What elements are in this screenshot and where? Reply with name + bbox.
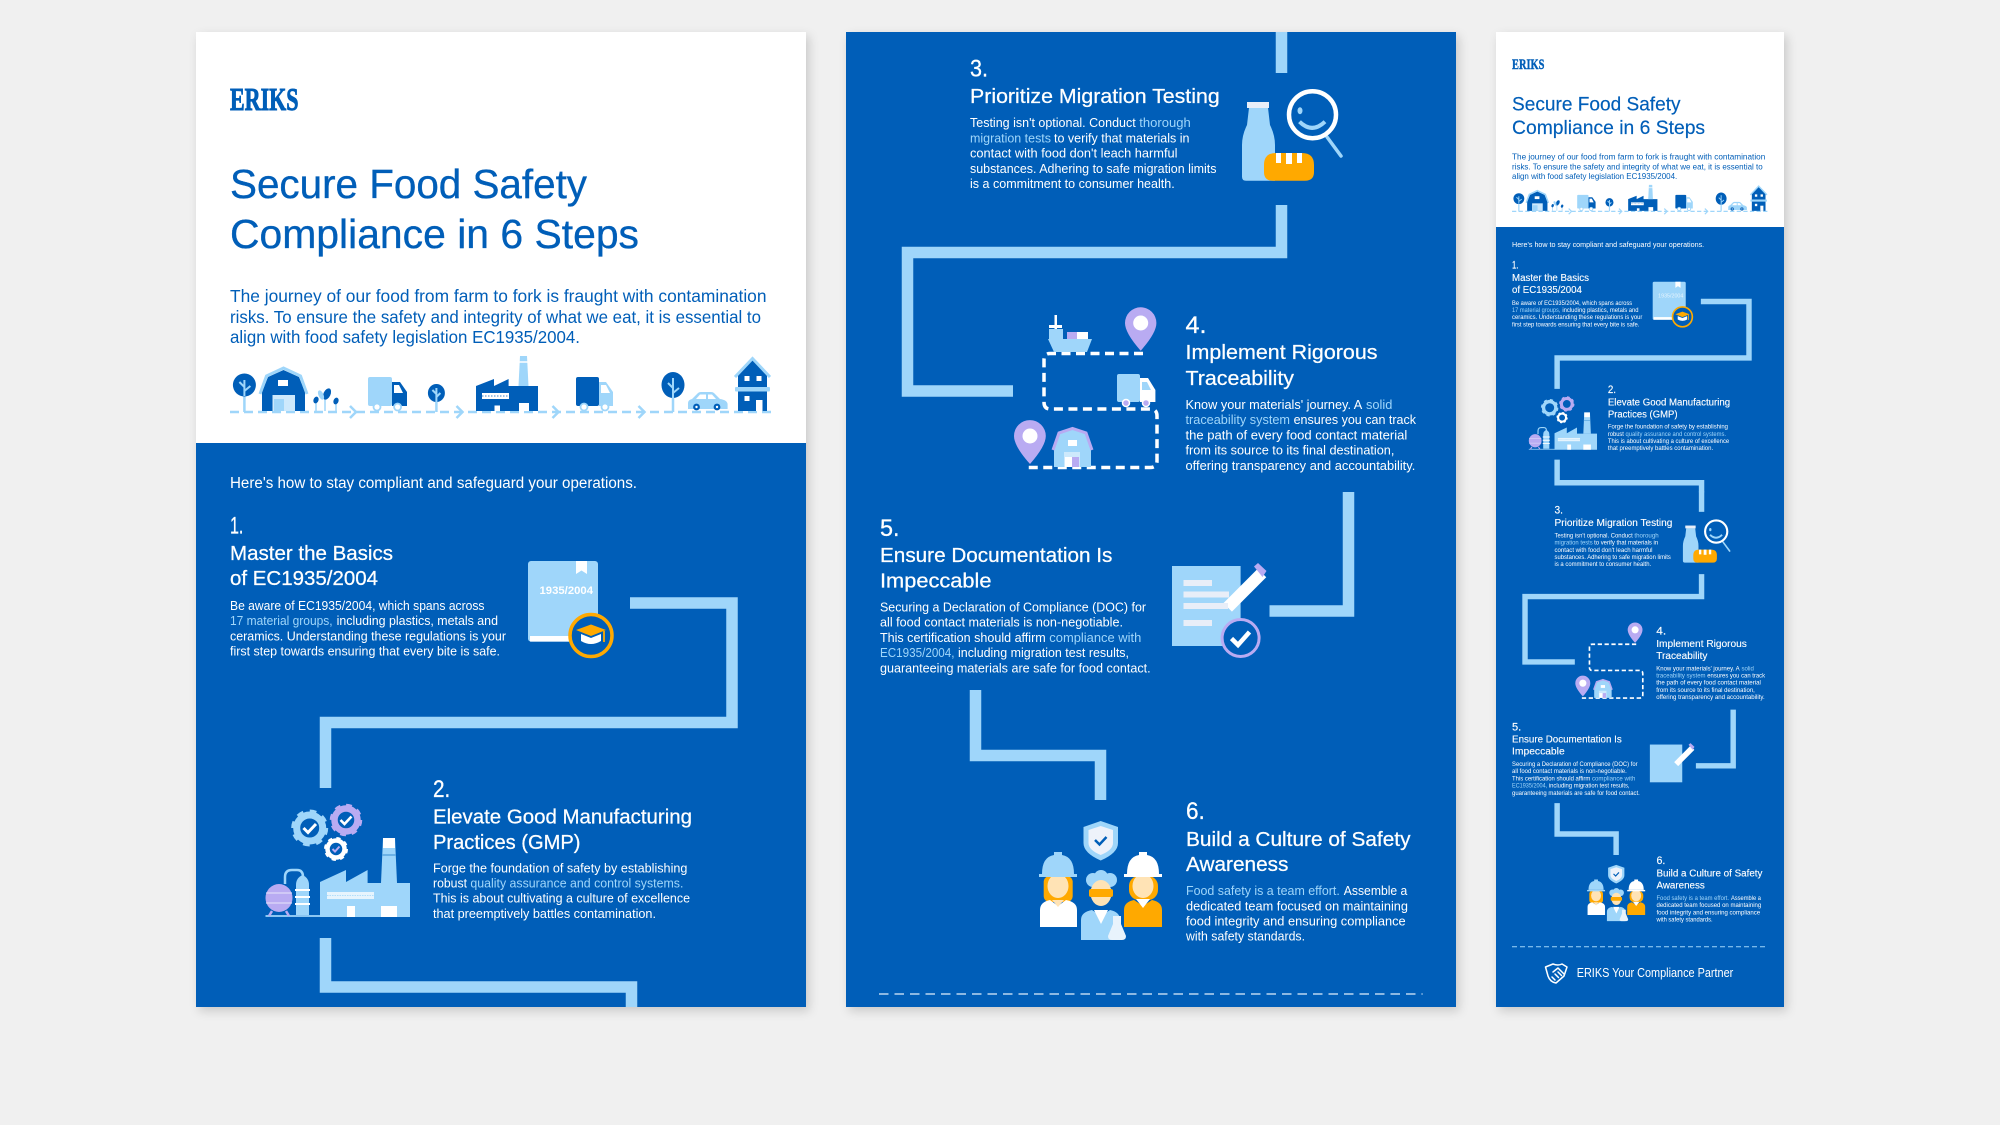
connector: step 3 to step 4 xyxy=(908,205,1282,391)
step 3 text small xyxy=(1555,505,1672,568)
title xyxy=(230,161,639,257)
step 5 text: compliance with xyxy=(1049,630,1141,645)
step 4 text small: offering transparency and accountability. xyxy=(1656,694,1765,701)
step 6 text: Build a Culture of Safety xyxy=(1186,828,1411,851)
step 6 text xyxy=(1185,798,1411,944)
step 2 text small: Practices (GMP) xyxy=(1608,410,1677,421)
icon small: document and pen xyxy=(1650,743,1694,782)
step 1 text xyxy=(230,512,507,658)
step 3 text small: to verify that materials in xyxy=(1594,540,1659,547)
icon small: bottle, bread and magnifier xyxy=(1683,520,1730,563)
step 6 text: with safety standards. xyxy=(1185,929,1305,944)
step 2 text: Practices (GMP) xyxy=(433,831,580,854)
step 1 text small: 17 material groups, xyxy=(1512,307,1561,314)
step 2 text small: quality assurance and control systems. xyxy=(1626,431,1726,438)
overview upper part: scaled cover content xyxy=(1512,57,1767,492)
step 4 text xyxy=(1186,312,1416,473)
step 5 text small: This certification should affirm xyxy=(1512,775,1590,782)
step 6 text: food integrity and ensuring compliance xyxy=(1186,914,1406,929)
step 2 text small xyxy=(1608,384,1730,452)
step 3 text: Testing isn't optional. Conduct xyxy=(970,115,1136,130)
step 1 text: including plastics, metals and xyxy=(337,613,498,628)
step 2 text: This is about cultivating a culture of excellence xyxy=(433,891,690,906)
step 3 text: migration tests xyxy=(970,131,1051,146)
step 5 text small: EC1935/2004, xyxy=(1512,783,1547,790)
illustration: farm to fork journey xyxy=(230,356,771,418)
panel background xyxy=(846,32,1456,1007)
step 3 text xyxy=(970,56,1220,191)
step 4 text: Know your materials' journey. A xyxy=(1186,397,1363,412)
step 5 text small xyxy=(1512,721,1640,797)
icon small: safety team with shield xyxy=(1587,865,1645,921)
panel background xyxy=(1496,32,1784,1007)
icon: regulation book with graduation cap xyxy=(528,561,612,656)
step 5 text small: Ensure Documentation Is xyxy=(1512,735,1622,746)
step 1 text small: 1. xyxy=(1512,260,1518,272)
step 4 text small: Implement Rigorous xyxy=(1656,639,1747,650)
logo: ERIKS small: ERIKS xyxy=(1512,57,1544,73)
step 3 text: to verify that materials in xyxy=(1054,131,1190,146)
connector: step 4 to step 5 xyxy=(1270,492,1348,611)
connector small: step 3 to step 4 xyxy=(1525,574,1702,662)
connector small: step 2 to step 3 xyxy=(1557,460,1702,492)
step 2 text: Elevate Good Manufacturing xyxy=(433,806,692,828)
step 6 text small: food integrity and ensuring compliance xyxy=(1656,909,1761,916)
step 4 text small: solid xyxy=(1741,665,1754,672)
logo: ERIKS: ERIKS xyxy=(230,81,298,117)
step 4 text: 4. xyxy=(1186,312,1206,339)
step 4 text: Implement Rigorous xyxy=(1186,341,1378,364)
icon: regulation book with graduation cap: 1935/2004 xyxy=(540,585,594,597)
step 4 text small xyxy=(1656,626,1766,701)
connector small: step 5 to step 6 xyxy=(1557,803,1616,855)
step 4 text: the path of every food contact material xyxy=(1186,427,1407,442)
icon: declaration document with pen and check xyxy=(1172,563,1266,656)
step 6 text small: Build a Culture of Safety xyxy=(1656,869,1763,880)
step 5 text small: guaranteeing materials are safe for food contact. xyxy=(1512,790,1640,797)
connector small: step 1 to step 2 xyxy=(1557,302,1749,389)
step 5 text: 5. xyxy=(880,515,900,542)
connector small: top entry into step 3 xyxy=(1696,492,1707,512)
step 5 text small: compliance with xyxy=(1592,775,1636,782)
intro text: risks. To ensure the safety and integrity of what we eat, it is essential to xyxy=(230,307,761,327)
step 3 text small: migration tests xyxy=(1555,540,1593,547)
lead-in text small: Here's how to stay compliant and safeguard your operations. xyxy=(1512,240,1704,249)
step 1 text small: Master the Basics xyxy=(1512,273,1589,284)
step 6 text: Awareness xyxy=(1186,853,1288,876)
intro text: The journey of our food from farm to fork is fraught with contamination xyxy=(230,286,766,306)
step 3 text small: is a commitment to consumer health. xyxy=(1555,561,1651,568)
step 3 text: is a commitment to consumer health. xyxy=(970,176,1175,191)
icon: gears and factory xyxy=(266,806,410,917)
step 5 text small: Impeccable xyxy=(1512,747,1565,758)
step 5 text small: 5. xyxy=(1512,721,1521,733)
step 2 text small: robust xyxy=(1608,431,1624,438)
step 2 text: quality assurance and control systems. xyxy=(470,876,683,890)
step 5 text small: Securing a Declaration of Compliance (DOC) for xyxy=(1512,761,1638,768)
step 4 text: solid xyxy=(1366,397,1392,412)
panel: full-length overview xyxy=(1496,32,1784,1007)
illustration small: farm to fork journey xyxy=(1512,185,1767,214)
lead-in text: Here's how to stay compliant and safeguard your operations. xyxy=(230,475,637,492)
icon: safety team with shield xyxy=(1039,821,1162,940)
step 2 text small: 2. xyxy=(1608,384,1616,396)
title small: Secure Food Safety xyxy=(1512,93,1681,115)
step 3 text: thorough xyxy=(1139,115,1191,130)
step 1 text: of EC1935/2004 xyxy=(230,567,378,590)
title small: Compliance in 6 Steps xyxy=(1512,117,1705,139)
step 2 text: robust xyxy=(433,876,467,890)
step 4 text: offering transparency and accountability. xyxy=(1186,458,1415,473)
step 3 text small: contact with food don't leach harmful xyxy=(1555,547,1652,554)
panel: page one cover xyxy=(196,32,806,1007)
step 3 text small: 3. xyxy=(1555,505,1563,517)
step 6 text: Assemble a xyxy=(1344,883,1408,898)
step 1 text small xyxy=(1512,260,1642,328)
icon small: regulation book xyxy=(1653,282,1692,327)
step 4 text: Traceability xyxy=(1186,367,1295,390)
step 4 text small: 4. xyxy=(1656,626,1666,638)
step 2 text small: that preemptively battles contamination. xyxy=(1608,445,1713,452)
connector: step 1 to step 2 xyxy=(326,603,732,788)
step 2 text xyxy=(433,776,692,921)
footer: compliance partner: ERIKS Your Compliance Partner xyxy=(1577,966,1733,980)
step 4 text small: the path of every food contact material xyxy=(1656,680,1761,687)
step 6 text: 6. xyxy=(1186,798,1205,825)
step 3 text small: Prioritize Migration Testing xyxy=(1555,518,1672,529)
title: Secure Food Safety xyxy=(230,161,587,207)
step 5 text: Securing a Declaration of Compliance (DOC) for xyxy=(880,600,1147,614)
step 2 text: Forge the foundation of safety by establishing xyxy=(433,860,687,876)
panel background: white header and blue body xyxy=(196,32,806,1007)
overview lower part: scaled steps content xyxy=(1512,492,1766,923)
step 1 text: Be aware of EC1935/2004, which spans across xyxy=(230,598,485,613)
intro text: align with food safety legislation EC1935/2004. xyxy=(230,327,580,347)
step 3 text small: substances. Adhering to safe migration limits xyxy=(1555,554,1671,561)
step 4 text small: from its source to its final destination, xyxy=(1656,687,1755,694)
step 1 text small: Be aware of EC1935/2004, which spans across xyxy=(1512,300,1632,307)
step 2 text small: Elevate Good Manufacturing xyxy=(1608,398,1730,409)
step 3 text: substances. Adhering to safe migration limits xyxy=(970,161,1217,176)
intro text small: The journey of our food from farm to fork is fraught with contamination xyxy=(1512,152,1766,161)
icon small: route with pins and barn xyxy=(1575,622,1643,698)
icon: traceability route with pins, ship, truck and barn xyxy=(1014,307,1157,468)
step 5 text: Ensure Documentation Is xyxy=(880,544,1112,567)
step 6 text: Food safety is a team effort. xyxy=(1186,883,1340,898)
step 3 text: Prioritize Migration Testing xyxy=(970,85,1220,108)
connector: top entry into step 3 xyxy=(1276,32,1287,73)
step 1 text small: ceramics. Understanding these regulations is your xyxy=(1512,314,1642,321)
intro text small xyxy=(1512,152,1766,181)
step 1 text: ceramics. Understanding these regulations is your xyxy=(230,628,507,644)
connector small: step 4 to step 5 xyxy=(1696,710,1733,766)
step 5 text xyxy=(880,515,1151,676)
connector: step 5 to step 6 xyxy=(976,690,1100,800)
icon small: gears and factory xyxy=(1529,397,1597,450)
step 5 text: Impeccable xyxy=(880,569,992,592)
step 6 text small: Assemble a xyxy=(1731,895,1761,902)
step 2 text small: This is about cultivating a culture of excellence xyxy=(1608,438,1730,445)
step 5 text: This certification should affirm xyxy=(880,630,1046,645)
step 6 text small xyxy=(1656,855,1763,923)
intro text small: align with food safety legislation EC1935/2004. xyxy=(1512,172,1677,181)
step 2 text: 2. xyxy=(433,776,450,803)
step 6 text small: Food safety is a team effort. xyxy=(1656,895,1729,902)
step 6 text: dedicated team focused on maintaining xyxy=(1186,898,1408,913)
step 4 text small: ensures you can track xyxy=(1707,673,1766,680)
step 1 text: 17 material groups, xyxy=(230,613,333,628)
step 4 text: traceability system xyxy=(1186,412,1290,427)
step 1 text: first step towards ensuring that every bite is safe. xyxy=(230,644,500,658)
step 1 text small: of EC1935/2004 xyxy=(1512,285,1583,296)
icon: bottle, bread and magnifier xyxy=(1242,91,1341,181)
step 1 text: 1. xyxy=(230,512,243,540)
step 3 text small: Testing isn't optional. Conduct xyxy=(1555,532,1633,539)
step 4 text small: Traceability xyxy=(1656,651,1708,662)
step 6 text small: 6. xyxy=(1656,855,1665,867)
step 4 text: ensures you can track xyxy=(1294,412,1416,427)
step 5 text: all food contact materials is non-negotiable. xyxy=(880,615,1123,630)
step 5 text: EC1935/2004, xyxy=(880,645,954,660)
panel: page two steps 3 to 6 xyxy=(846,32,1456,1007)
step 2 text: that preemptively battles contamination. xyxy=(433,906,656,921)
step 1 text small: including plastics, metals and xyxy=(1562,307,1639,314)
intro text xyxy=(230,286,766,347)
title: Compliance in 6 Steps xyxy=(230,211,639,257)
connector: step 2 to step 3 xyxy=(326,938,632,1007)
step 6 text small: dedicated team focused on maintaining xyxy=(1656,902,1762,909)
step 3 text: contact with food don't leach harmful xyxy=(970,146,1178,161)
step 2 text small: Forge the foundation of safety by establishing xyxy=(1608,424,1729,431)
icon small: regulation book: 1935/2004 xyxy=(1658,293,1683,299)
intro text small: risks. To ensure the safety and integrity of what we eat, it is essential to xyxy=(1512,162,1763,171)
step 4 text small: Know your materials' journey. A xyxy=(1656,665,1741,672)
step 1 text: Master the Basics xyxy=(230,542,393,565)
step 5 text small: all food contact materials is non-negotiable. xyxy=(1512,768,1627,775)
icon: handshake xyxy=(1546,964,1567,983)
step 6 text small: Awareness xyxy=(1656,881,1705,892)
step 1 text small: first step towards ensuring that every bite is safe. xyxy=(1512,321,1640,328)
step 5 text: guaranteeing materials are safe for food contact. xyxy=(880,660,1151,676)
step 5 text small: including migration test results, xyxy=(1549,783,1630,790)
step 5 text: including migration test results, xyxy=(958,645,1129,660)
step 6 text small: with safety standards. xyxy=(1656,916,1713,923)
step 4 text small: traceability system xyxy=(1656,673,1706,680)
step 3 text small: thorough xyxy=(1634,532,1659,539)
title small xyxy=(1512,93,1705,139)
step 3 text: 3. xyxy=(970,56,988,83)
step 4 text: from its source to its final destination, xyxy=(1186,443,1394,458)
